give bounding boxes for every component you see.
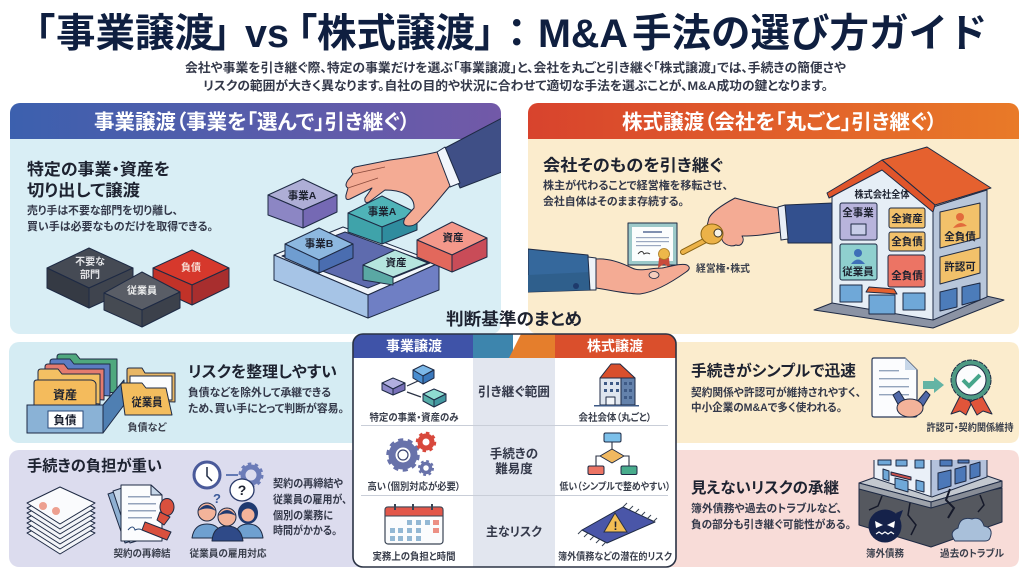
- label: liabilities etc: 負債など: [128, 421, 167, 434]
- sub-panel: all assets: 全資産: [891, 212, 923, 225]
- sub-panel: employees: 従業員: [842, 265, 874, 278]
- title: 」: [210, 12, 250, 56]
- description: 契約の再締結や: [273, 476, 343, 490]
- description: 会社自体はそのまま存続する。: [543, 194, 684, 208]
- block: business A purple: 事業A: [288, 189, 317, 202]
- title: 「: [16, 12, 56, 56]
- caption: difficulty stock: 低い（シンプルで整めやすい）: [560, 480, 670, 493]
- subheading: 会社そのものを引き継ぐ: [543, 156, 724, 175]
- boxes: unwanted items: 従業員: [127, 284, 157, 297]
- icon: flowchart: [588, 433, 637, 474]
- block: business A teal: 事業A: [368, 205, 397, 218]
- subheading: [27, 160, 170, 200]
- icon: open hand with sleeve: [528, 249, 689, 294]
- table header: business transfer: 事業譲渡: [386, 338, 442, 354]
- icon: monster: [868, 510, 903, 542]
- panel: heavy procedures: [9, 450, 429, 567]
- subheading: 切り出して譲渡: [27, 180, 141, 200]
- description: 従業員の雇用が、: [273, 492, 347, 506]
- icon: certificate: [628, 223, 677, 268]
- sub-panel: all claims: [940, 203, 980, 248]
- label: contract renewal: 契約の再締結: [114, 547, 170, 560]
- label: permits and contracts maintained: 許認可・契約関係維持: [926, 421, 1014, 434]
- sub-panel: all businesses: [840, 203, 877, 240]
- boxes: unwanted items: [47, 248, 229, 327]
- icon: clock, gear and people: ?: [238, 482, 246, 498]
- sub-panel: all liabilities: 全負債: [891, 235, 923, 248]
- sub-panel: permits: 許認可: [944, 260, 976, 273]
- title: 事業譲渡: [56, 12, 214, 56]
- icon: key: [683, 224, 723, 252]
- intro text: リスクの範囲が大きく異なります。自社の目的や状況に合わせて適切な手法を選ぶことが、M&A成功の鍵となります。: [203, 78, 828, 93]
- caption: difficulty business: 高い（個別対応が必要）: [368, 480, 460, 493]
- intro text: [185, 60, 846, 93]
- row label: scope: 引き継ぐ範囲: [478, 384, 550, 399]
- comparison table: [353, 334, 676, 567]
- header: stock transfer: 株式譲渡（会社を「丸ごと」引き継ぐ）: [622, 110, 937, 134]
- icon: document stack: [27, 487, 95, 554]
- boxes: unwanted items: 負債: [181, 261, 201, 274]
- arrow: [923, 377, 944, 393]
- heading: 手続きがシンプルで迅速: [691, 361, 856, 380]
- description: [188, 385, 344, 415]
- row label: difficulty: 難易度: [495, 461, 533, 476]
- description: 契約関係や許認可が維持されやすく、: [691, 385, 861, 399]
- description: 時間がかかる。: [273, 523, 337, 537]
- panel: stock transfer: [528, 103, 1019, 334]
- block: assets red: 資産: [442, 231, 464, 244]
- caption: risk business: 実務上の負担と時間: [372, 550, 456, 563]
- label: whole company: 株式会社全体: [854, 188, 910, 201]
- icon: cloud: [952, 518, 991, 541]
- description: 負債などを除外して承継できる: [188, 385, 331, 399]
- label: employee handling: 従業員の雇用対応: [190, 547, 266, 560]
- label: off-balance debts: 簿外債務: [866, 547, 904, 560]
- description: [273, 476, 347, 537]
- description: 中小企業のM&Aで多く使われる。: [691, 400, 842, 414]
- panel: business transfer: [10, 103, 502, 334]
- icon: file box: [27, 354, 124, 433]
- description: 負の部分も引き継ぐ可能性がある。: [691, 517, 851, 531]
- block: assets red: [417, 222, 487, 272]
- tray with blocks: 事業B: [305, 237, 334, 250]
- sub-panel: all liabilities red: [888, 255, 925, 287]
- description: [691, 385, 861, 414]
- boxes: unwanted items: 部門: [80, 268, 100, 281]
- description: [27, 203, 213, 233]
- icon: clock, gear and people: ?: [213, 491, 221, 506]
- heading: 見えないリスクの承継: [691, 479, 839, 497]
- title: 」: [474, 12, 514, 56]
- label: liabilities: 負債: [54, 413, 77, 427]
- subheading: 特定の事業・資産を: [27, 160, 170, 179]
- icon: rug with warning: [578, 503, 657, 546]
- sub-panel: permits: [940, 247, 980, 284]
- icon: contract and stamp: [108, 485, 174, 543]
- label: management rights and shares: 経営権・株式: [696, 262, 750, 275]
- icon: office building: [594, 364, 639, 406]
- sub-panel: all businesses: 全事業: [842, 206, 874, 219]
- heading: 手続きの負担が重い: [27, 456, 162, 475]
- title: M&A: [538, 12, 628, 56]
- panel: easy risk management: [9, 342, 429, 443]
- title: 手法の選び方ガイド: [632, 12, 988, 56]
- icon: hand picking block: [346, 118, 502, 226]
- description: [543, 178, 728, 208]
- header: business transfer: 事業譲渡（事業を「選んで」引き継ぐ）: [94, 111, 410, 134]
- caption: risk stock: 簿外債務などの潜在的リスク: [558, 550, 672, 563]
- icon: hand with key and sleeve: [707, 198, 833, 246]
- summary heading: 判断基準のまとめ: [446, 309, 582, 329]
- icon: clock, gear and people: [192, 462, 263, 541]
- sub-panel: all liabilities: [889, 232, 925, 251]
- sub-panel: all liabilities red: 全負債: [891, 269, 923, 282]
- description: 個別の業務に: [273, 508, 333, 522]
- description: 買い手は必要なものだけを取得できる。: [27, 219, 213, 233]
- table header: stock transfer: 株式譲渡: [587, 338, 643, 354]
- title: ：: [497, 12, 536, 56]
- row label: difficulty: [490, 446, 538, 476]
- icon: calendar: [385, 504, 443, 544]
- block: business A purple: [268, 179, 337, 228]
- sub-panel: employees: [840, 244, 877, 280]
- panel: hidden risk: [640, 450, 1019, 567]
- icon: company building: [814, 147, 1004, 328]
- tray with blocks: 資産: [386, 256, 407, 269]
- icon: cubes: [382, 365, 446, 407]
- title: vs: [245, 12, 289, 56]
- sub-panel: all claims: 全負債: [944, 230, 976, 243]
- description: [691, 501, 851, 531]
- icon: employee folder: [121, 368, 175, 415]
- caption: scope stock: 会社会体（丸ごと）: [578, 411, 652, 424]
- icon: gears: [388, 433, 435, 475]
- description: ため、買い手にとって判断が容易。: [188, 401, 344, 415]
- boxes: unwanted items: 不要な: [75, 256, 105, 268]
- icon: employee folder: 従業員: [132, 395, 163, 409]
- tray with blocks: [274, 227, 439, 318]
- row label: difficulty: 手続きの: [490, 446, 538, 461]
- caption: scope business: 特定の事業・資産のみ: [370, 411, 459, 424]
- description: 株主が代わることで経営権を移転させ、: [543, 178, 728, 192]
- title: 「: [278, 12, 318, 56]
- label: assets: 資産: [53, 387, 77, 402]
- icon: rug with warning: !: [614, 519, 618, 533]
- icon: cracked foundation building: [859, 460, 1002, 547]
- label: past trouble: 過去のトラブル: [940, 547, 1004, 560]
- panel: simple procedures: [640, 342, 1019, 443]
- title: 株式譲渡: [317, 12, 475, 56]
- description: 売り手は不要な部門を切り離し、: [27, 203, 178, 217]
- icon: document and handshake: [872, 358, 930, 417]
- block: business A teal: [348, 196, 417, 244]
- heading: リスクを整理しやすい: [188, 363, 337, 381]
- sub-panel: all assets: [889, 208, 925, 228]
- description: 簿外債務や過去のトラブルなど、: [691, 501, 842, 515]
- icon: ribbon badge: [951, 360, 992, 415]
- intro text: 会社や事業を引き継ぐ際、特定の事業だけを選ぶ「事業譲渡」と、会社を丸ごと引き継ぐ「株式譲渡」では、手続きの簡便さや: [185, 60, 846, 75]
- row label: main risk: 主なリスク: [486, 524, 542, 539]
